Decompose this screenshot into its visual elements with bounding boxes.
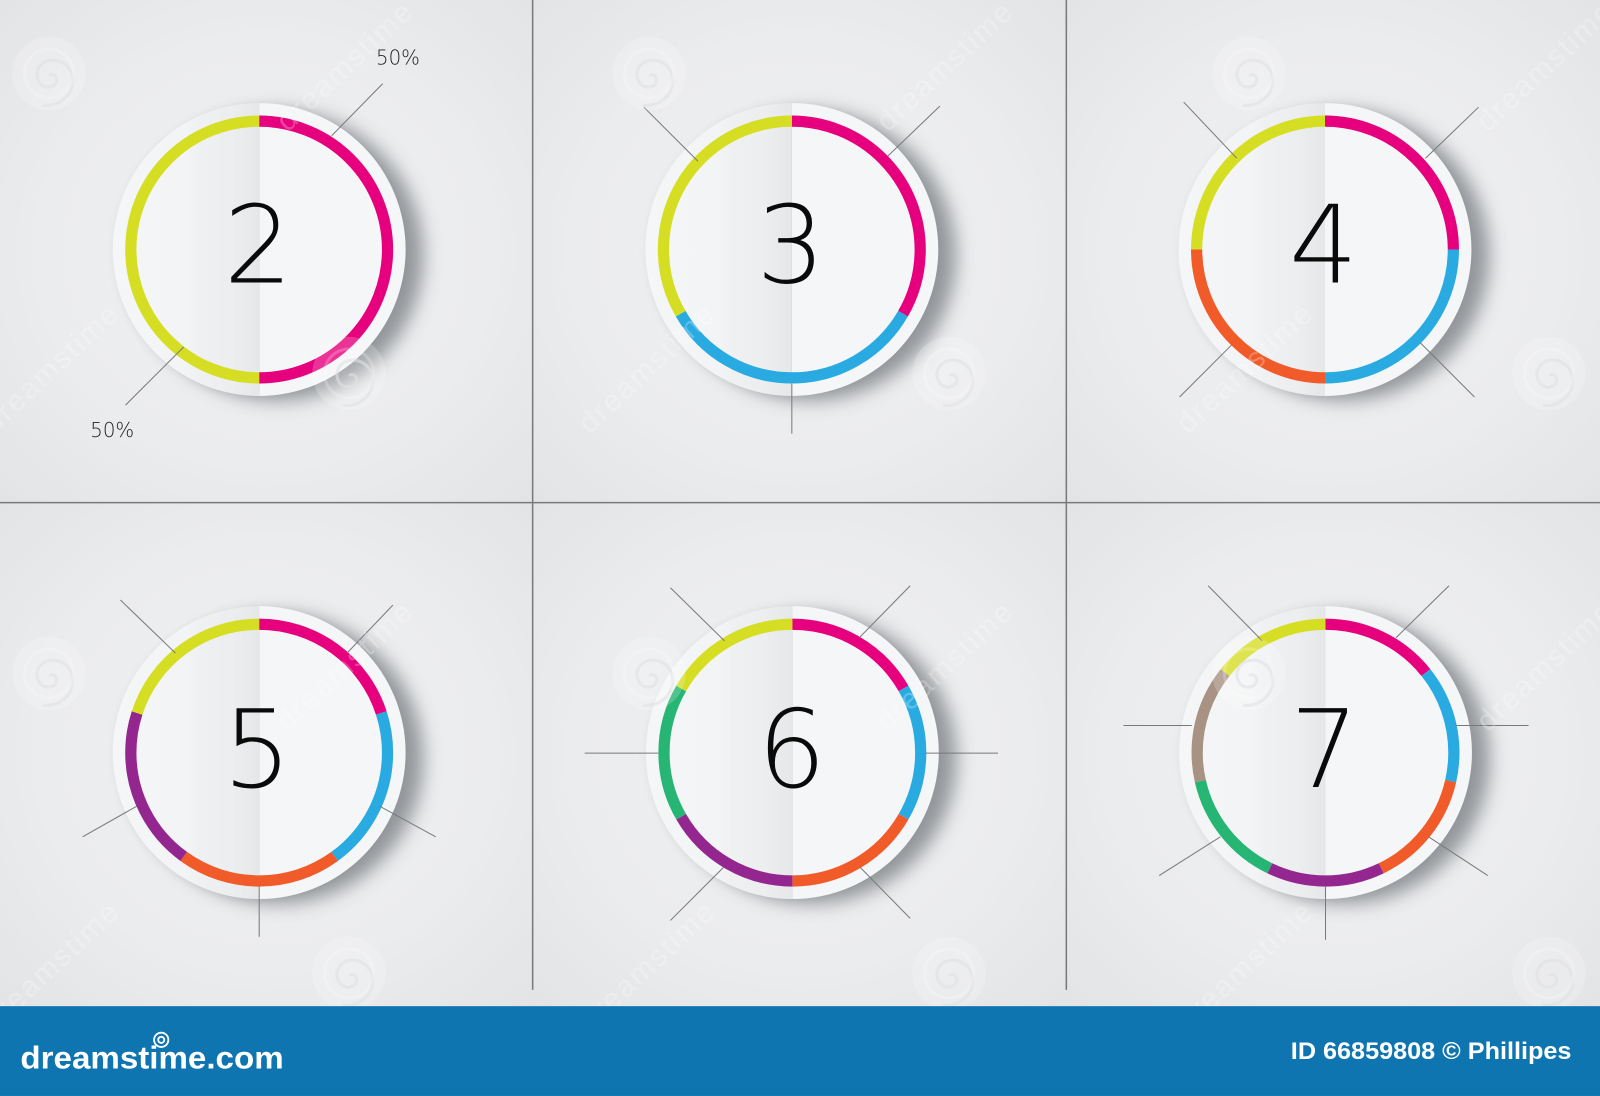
leader lines [644,106,940,434]
number: 7 [1290,687,1359,813]
disc [646,606,957,904]
logo spiral icon [154,1033,168,1047]
image id and credit: ID 66859808 © Phillipes [1291,1038,1571,1065]
number: 5 [223,687,292,813]
label: 50% bottom: 50% [90,418,134,442]
leader lines [1180,102,1479,397]
panel: 6 segments [585,586,998,920]
panel: 7 segments [1123,586,1529,940]
footer band [0,1006,1600,1096]
number: 2 [224,183,293,309]
disc [113,606,423,904]
disc [1179,103,1489,401]
segmented ring [663,121,920,378]
watermark text: dreamstime [1170,894,1320,1038]
segmented ring [1197,624,1454,881]
logo wordmark: dreamstime.com [20,1039,284,1075]
segmented ring [131,624,388,881]
label: 50% top: 50% [376,45,420,69]
number: 4 [1289,183,1358,309]
leader lines [585,586,998,920]
number: 6 [757,687,826,813]
leader lines [83,600,436,937]
panel: 5 segments [83,600,436,937]
panel: 2 segments [90,45,423,442]
leader lines [126,84,383,405]
panel: 4 segments [1179,102,1489,401]
panel: 3 segments [644,103,956,434]
watermark text: dreamstime [270,594,420,738]
leader lines [1123,586,1529,940]
disc [645,103,956,401]
watermark text: dreamstime [870,594,1020,738]
disc [113,103,423,401]
watermark text: dreamstime [572,296,722,440]
disc [1179,606,1490,904]
segmented ring [664,624,921,881]
segmented ring [1197,121,1453,378]
number: 3 [756,183,825,309]
segmented ring [131,121,388,378]
watermark text: dreamstime [572,894,722,1038]
watermark text: dreamstime [1170,296,1320,440]
